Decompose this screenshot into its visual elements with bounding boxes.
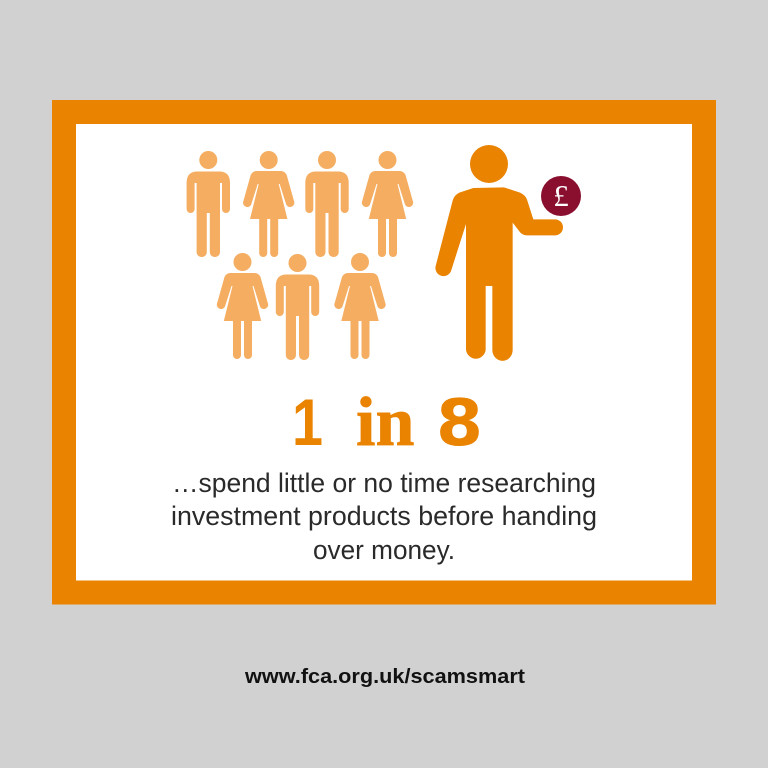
icon: woman 2 bbox=[362, 151, 413, 257]
headline: 1 in 8 bbox=[292, 384, 483, 461]
headline: 1 in 8: 1 bbox=[292, 385, 323, 459]
large man figure bbox=[435, 145, 563, 361]
headline: 1 in 8: 8 bbox=[436, 387, 483, 461]
icon: woman 4 bbox=[334, 253, 386, 359]
body text: investment products before handing bbox=[171, 501, 597, 531]
icon: woman 1 bbox=[243, 151, 294, 257]
body text bbox=[171, 468, 597, 565]
panel: orange frame bbox=[64, 112, 704, 592]
pound coin bbox=[541, 176, 581, 216]
icon: man 3 bbox=[276, 254, 319, 360]
icon: group of seven people bbox=[187, 151, 413, 360]
website url: www.fca.org.uk/scamsmart bbox=[244, 666, 525, 688]
pound symbol: £ bbox=[553, 178, 569, 213]
icon: man 2 bbox=[305, 151, 349, 257]
icon: woman 3 bbox=[217, 253, 268, 359]
icon: man 1 bbox=[187, 151, 230, 257]
body text: …spend little or no time researching bbox=[172, 468, 596, 498]
headline: 1 in 8: in bbox=[356, 384, 414, 461]
icon: large man holding pound coin bbox=[435, 145, 581, 361]
body text: over money. bbox=[313, 535, 455, 565]
